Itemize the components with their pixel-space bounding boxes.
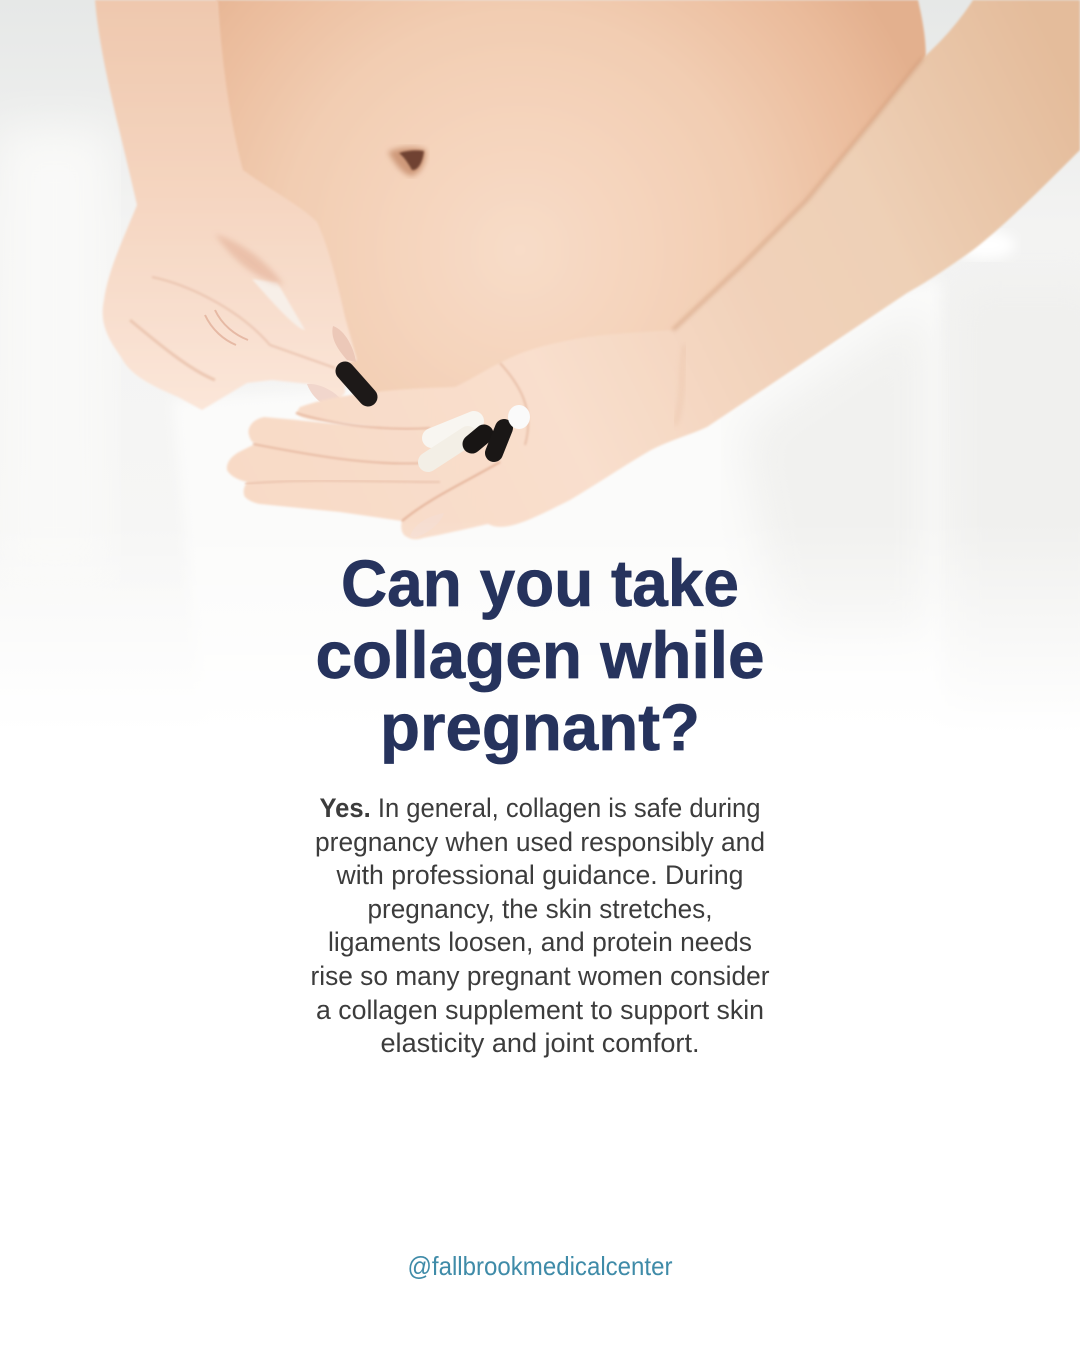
left arm and hand: [95, 0, 357, 410]
black capsules: [472, 434, 484, 444]
body text: with professional guidance. During: [336, 860, 744, 890]
white ball capsule: [508, 405, 530, 429]
left hand: thumb nail: [332, 326, 356, 362]
handle: @fallbrookmedicalcenter: [408, 1251, 673, 1281]
body text: a collagen supplement to support skin: [316, 995, 764, 1025]
left hand: index nail: [307, 384, 342, 410]
right thumb nail: [410, 513, 444, 538]
body text: ligaments loosen, and protein needs: [328, 927, 752, 957]
title: Can you take: [341, 546, 739, 620]
body text: rise so many pregnant women consider: [310, 961, 770, 991]
right arm, palm and fingers: [227, 0, 1080, 539]
body text: [310, 793, 770, 1058]
body text: pregnancy when used responsibly and: [315, 827, 765, 857]
title: collagen while: [316, 618, 764, 692]
body text: elasticity and joint comfort.: [380, 1028, 700, 1058]
capsules: [345, 371, 504, 462]
photo: pregnant belly and hands holding capsules: [0, 0, 1080, 820]
title: [316, 546, 764, 764]
body text: pregnancy, the skin stretches,: [368, 894, 712, 924]
belly: [216, 0, 926, 405]
crease between belly and arm: [673, 58, 923, 330]
white capsules: [432, 421, 474, 438]
body text: Yes. In general, collagen is safe during: [320, 793, 760, 823]
left hand: gap between thumb and index: [252, 279, 305, 330]
held black capsule: [345, 371, 368, 397]
navel: [388, 147, 426, 176]
title: pregnant?: [380, 690, 700, 764]
fade to white: [0, 520, 1080, 820]
